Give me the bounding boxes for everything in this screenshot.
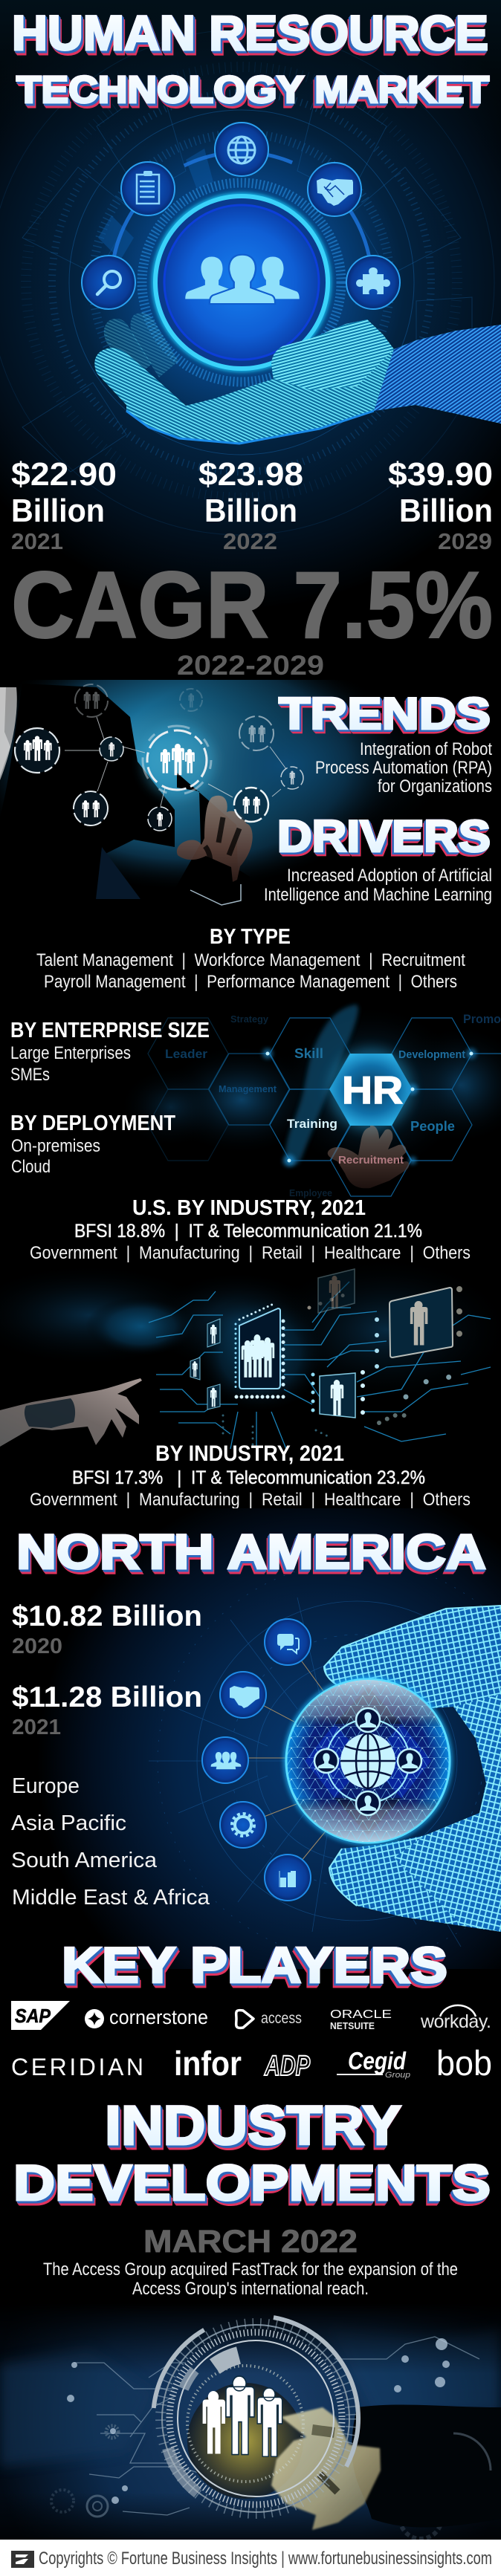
text block: development description: Access Group's international reach. [132,2279,369,2299]
card: person middle [320,1373,355,1418]
list: regions: Middle East & Africa [12,1886,210,1910]
logo: oracle netsuite: ORACLE [330,2008,392,2021]
footer [0,2540,501,2576]
icon: gear [220,1802,266,1848]
illustration: globe sphere with avatars [225,1642,453,1878]
logo: cegid: Group [385,2071,410,2080]
stat: 2021 market size: $22.90 [11,456,117,493]
text block: by industry: BY INDUSTRY, 2021 [155,1441,344,1466]
network node [74,791,108,825]
stat: north america 2020: $10.82 Billion [12,1600,202,1632]
stat: 2029 market size: 2029 [438,528,492,554]
network node [281,767,303,789]
dark sleeve [352,2404,501,2528]
stat: 2022 market size: 2022 [223,528,277,554]
text block: by enterprise size: Large Enterprises [10,1043,131,1063]
stat: 2021 market size: 2021 [11,528,63,554]
text block: trends description [315,739,492,797]
stat: north america 2020: 2020 [12,1635,62,1658]
illustration: HR hexagon network: Strategy [230,1013,269,1025]
stat: north america 2021 [12,1681,202,1739]
illustration: HR hexagon network: Employee [289,1187,332,1198]
text block: drivers description [264,866,492,905]
stat: 2029 market size: Billion [399,493,493,529]
text block: U.S. by industry: U.S. BY INDUSTRY, 2021 [132,1196,366,1220]
text block: by deployment: BY DEPLOYMENT [10,1112,175,1135]
logo: infor: infor [174,2044,242,2083]
icon: bar chart [265,1855,311,1901]
list: regions: Asia Pacific [11,1811,126,1835]
illustration: finger touching people network [0,680,408,906]
logo: SAP: SAP [15,2005,51,2027]
illustration: HR hexagon network: Skill [294,1046,323,1061]
panel: hero background [0,0,501,617]
icon: people [202,1737,248,1783]
heading: trends: TRENDS [279,689,491,739]
network node [234,788,268,822]
icon: handshake [308,163,361,216]
avatars [314,1708,421,1815]
icon: clipboard [121,162,175,215]
hand [271,2407,381,2530]
stat: 2022 market size: Billion [204,493,297,529]
text block: by deployment: On-premises [11,1136,100,1156]
heading: key players: KEY PLAYERS [62,1937,447,1993]
text block: by type [36,925,465,992]
network node [143,726,211,794]
icon: three people [185,255,300,304]
text block: by deployment: Cloud [11,1157,51,1177]
list: regions [11,1774,210,1910]
illustration: HR hexagon network: Development [398,1048,465,1061]
text block: U.S. by industry [30,1196,471,1263]
title: HUMAN RESOURCE [12,5,488,60]
heading: drivers: DRIVERS [277,811,491,861]
icon: magnifier [82,256,135,309]
network node [180,689,202,711]
circuit traces [74,2337,479,2515]
date: march 2022: MARCH 2022 [143,2224,358,2259]
title [12,5,489,111]
list: regions: South America [11,1849,158,1872]
illustration: HR hexagon network: People [410,1119,455,1134]
stat: 2029 market size: $39.90 [388,456,493,493]
text block: development description [43,2259,458,2299]
icon: puzzle piece [346,256,400,309]
logos: key players [11,2001,492,2083]
icon: chat bubbles [265,1619,311,1665]
hand pressing HR [328,1126,409,1188]
stat: 2029 market size [388,456,493,554]
stat: 2022 market size: $23.98 [198,456,303,493]
illustration: circuit board with people [0,1256,501,1456]
logo: cegid [337,2047,410,2080]
logo: cegid: Cegid [348,2047,407,2074]
heading: industry developments: DEVELOPMENTS [13,2155,491,2211]
illustration: wireframe hand [94,313,501,444]
heading: north america: NORTH AMERICA [16,1524,486,1579]
HUD rings [137,2300,375,2537]
text block: U.S. by industry: BFSI 18.8% | IT & Telecommunication 21.1% [74,1221,422,1242]
logo: SAP [11,2001,70,2030]
text block: by enterprise size: SMEs [10,1065,50,1085]
icon: fortune business insights logo [11,2551,34,2568]
network node [75,684,108,717]
panel: north america background [0,1508,501,1969]
heading: industry developments [13,2095,491,2211]
text block: by industry [30,1441,471,1510]
logo: cornerstone: cornerstone [109,2006,208,2028]
icon: globe [215,123,268,176]
logo: access: access [261,2010,302,2027]
three people [203,2376,282,2456]
list: regions: Europe [12,1774,80,1798]
icon: handshake [220,1672,266,1718]
text block: by industry: BFSI 17.3% | IT & Telecommunication 23.2% [72,1467,425,1488]
text block: by enterprise size [10,1019,210,1085]
logo: workday: workday. [420,2011,491,2032]
illustration: HR hexagon network: HR [342,1069,403,1112]
logo: access [236,2010,302,2028]
icon: globe [340,1733,395,1788]
text block: by deployment [10,1112,175,1177]
small person cards [190,1319,220,1409]
network node [148,807,172,831]
hand pointing [0,1378,142,1447]
stat: CAGR: 2022-2029 [177,650,324,681]
hand [177,796,253,882]
text block: by type: BY TYPE [210,925,291,949]
logo: ADP: ADP [264,2051,310,2082]
illustration: HR hexagon network: Management [219,1083,277,1094]
stat: north america 2021: $11.28 Billion [12,1681,202,1713]
text block: by enterprise size: BY ENTERPRISE SIZE [10,1019,210,1042]
network node [100,737,123,761]
illustration: HR hexagon network: Leader [165,1047,207,1061]
logo: oracle netsuite: NETSUITE [330,2020,375,2031]
stat: north america 2020 [12,1600,202,1658]
illustration: wireframe hand holding globe [324,1606,501,1932]
stat: 2021 market size: Billion [11,493,105,529]
network node [239,716,274,750]
stat: 2021 market size [11,456,117,554]
card: person top [318,1269,355,1313]
illustration: central HR disc with orbit icons [82,123,400,424]
main chip with three people [239,1308,280,1389]
illustration: HR hexagon network: Training [287,1117,337,1131]
illustration: HR hexagon network [119,1004,501,1198]
logo: ceridian: CERIDIAN [11,2054,143,2080]
logo: oracle netsuite [330,2008,392,2031]
heading: industry developments: INDUSTRY [105,2095,401,2156]
stat: north america 2021: 2021 [12,1716,61,1739]
logo: bob: bob [436,2043,492,2083]
stat: 2022 market size [198,456,303,554]
title: TECHNOLOGY MARKET [16,68,489,111]
card: person large [390,1288,453,1357]
illustration: finger touching HUD with people [0,2300,501,2540]
network node [15,728,59,773]
illustration: HR hexagon network: Recruitment [338,1154,404,1167]
